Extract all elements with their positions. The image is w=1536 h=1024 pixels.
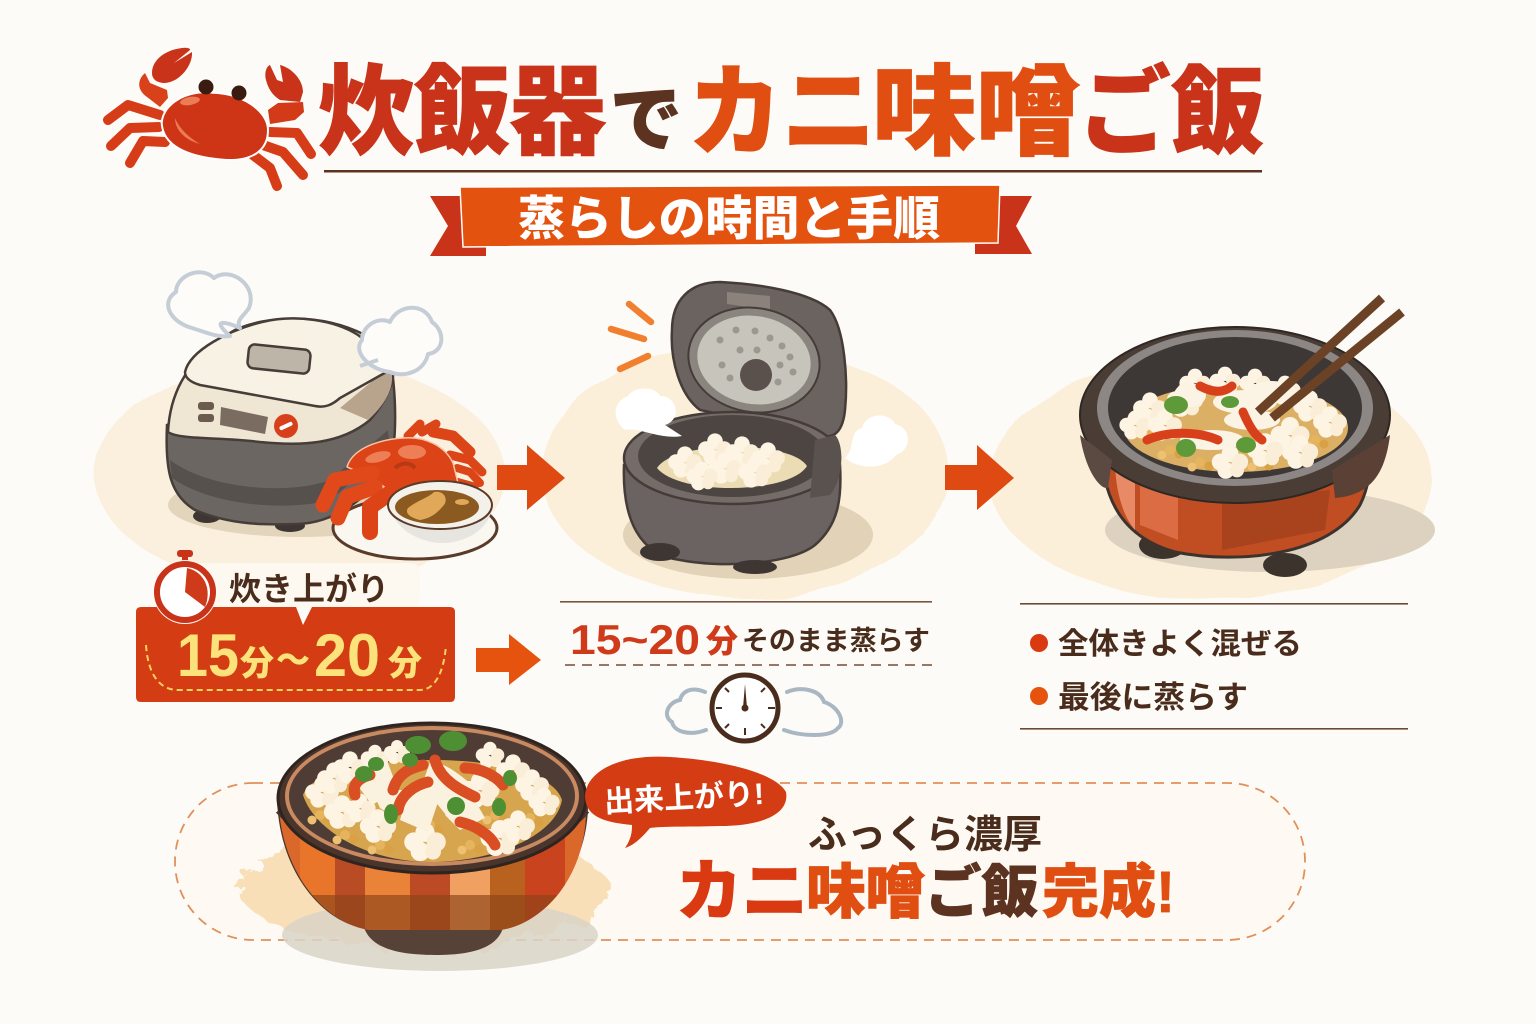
mixing tips list: 全体きよく混ぜる (1058, 628, 1302, 661)
infographic canvas (94, 48, 1435, 971)
watercolor blob 1 (95, 360, 505, 590)
title group (108, 48, 1264, 186)
panel: finished dish (175, 723, 1305, 971)
title underline (324, 170, 1262, 172)
cooker base (624, 465, 840, 564)
arrow: step 1 to 2 (497, 445, 565, 510)
result box: 15–20 minutes: 分 (388, 645, 422, 683)
speech bubble (585, 757, 786, 848)
bowl of crab rice (270, 723, 600, 971)
clock with steam (667, 675, 841, 741)
result box: 15–20 minutes: 15 (177, 622, 239, 689)
mixing tips list (1020, 603, 1408, 730)
completion message: 完成! (1042, 860, 1175, 925)
title group: カニ (688, 57, 876, 169)
crab mascot icon (108, 48, 311, 186)
subtitle ribbon (430, 185, 1032, 256)
result box: 15–20 minutes (136, 607, 455, 702)
steaming caption (560, 601, 936, 665)
arrow: time to step 2 (476, 634, 541, 685)
completion message (676, 814, 1175, 928)
result box: 15–20 minutes: 分 (240, 645, 274, 683)
orange spark lines (611, 304, 651, 369)
completion message: 味噌 (806, 859, 925, 926)
result box: 15–20 minutes: 20 (314, 622, 380, 689)
watercolor blob 2 (540, 346, 950, 598)
steam clouds (168, 272, 441, 374)
stopwatch and label: 炊き上がり (229, 571, 389, 607)
title group: 味噌 (872, 57, 1080, 169)
pot with mixed rice (1080, 327, 1435, 577)
chopsticks (1258, 298, 1402, 418)
panel: step 3 mixing (988, 298, 1435, 730)
steam clouds white (616, 388, 908, 467)
steaming caption: そのまま蒸らす (742, 626, 930, 656)
title group: で (610, 81, 682, 161)
result box: 15–20 minutes: 〜 (276, 642, 310, 680)
completion message: カニ (676, 854, 808, 928)
rice cooker closed (167, 318, 432, 537)
watercolor blob 3 (988, 356, 1432, 600)
arrow: step 2 to 3 (945, 445, 1014, 510)
dashed banner (175, 783, 1305, 940)
steaming caption: 分 (706, 623, 738, 659)
stopwatch and label (136, 550, 455, 702)
rice cooker open (623, 282, 873, 579)
title group: ご飯 (1078, 60, 1264, 167)
open lid (672, 282, 846, 436)
steaming caption: 15~20 (570, 616, 700, 663)
mixing tips list: 最後に蒸らす (1058, 680, 1248, 715)
panel: step 1 cooking (95, 272, 505, 702)
panel: step 2 steaming (540, 282, 950, 741)
speech bubble: 出来上がり! (603, 777, 765, 819)
completion message: ご飯 (925, 861, 1038, 925)
crab on plate with sauce bowl (323, 424, 497, 559)
subtitle ribbon: 蒸らしの時間と手順 (518, 192, 940, 245)
completion message: ふっくら濃厚 (808, 814, 1042, 857)
watercolor splash (240, 832, 610, 948)
title text: 炊飯器 (318, 57, 606, 167)
